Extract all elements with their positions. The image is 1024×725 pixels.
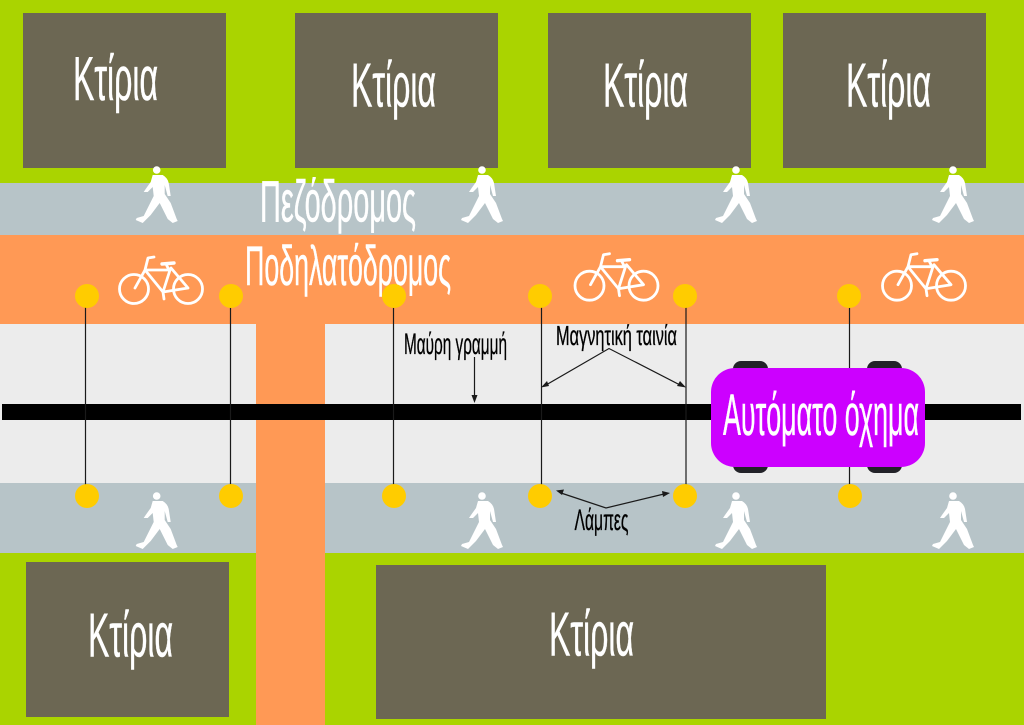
- magnetic strips: [86, 296, 850, 496]
- label: black line with arrow: [404, 328, 507, 403]
- building: top 3: Κτίρια: [603, 52, 688, 120]
- building: top 1: [23, 13, 226, 168]
- building: top 4: [783, 13, 986, 168]
- building: top 2: [295, 13, 498, 168]
- autonomous vehicle: [711, 361, 925, 473]
- label: magnetic strip with arrows: Μαγνητική ταινία: [556, 320, 677, 351]
- cycle path: vertical: [256, 324, 325, 725]
- building: bottom 2: [376, 565, 826, 719]
- icon: bicycle 2: [575, 254, 658, 300]
- label: lamps with arrows: [556, 490, 670, 537]
- building: bottom 1: [26, 562, 229, 717]
- building: top 1: Κτίρια: [73, 45, 158, 114]
- icons: pedestrians bottom row: [136, 492, 974, 549]
- text: Ποδηλατόδρομος: [245, 234, 451, 297]
- pedestrian walkway: bottom: [0, 483, 1024, 553]
- building: bottom 2: Κτίρια: [549, 600, 634, 670]
- icon: bicycle 1: [120, 257, 202, 304]
- building: top 4: Κτίρια: [846, 52, 931, 120]
- icon: bicycle 3: [882, 254, 966, 300]
- building: top 3: [548, 13, 751, 168]
- building: top 2: Κτίρια: [351, 52, 436, 120]
- black guide line: [2, 404, 1021, 420]
- label: black line with arrow: Μαύρη γραμμή: [404, 328, 507, 361]
- lamps: [75, 284, 862, 508]
- cycle path: horizontal: [0, 235, 1024, 324]
- label: lamps with arrows: Λάμπες: [574, 504, 628, 537]
- pedestrian walkway: top: [0, 183, 1024, 235]
- building: bottom 1: Κτίρια: [88, 602, 173, 670]
- label: magnetic strip with arrows: [541, 320, 686, 388]
- road surface: [0, 324, 1024, 483]
- icons: pedestrians top row: [136, 166, 974, 223]
- text: Πεζόδρομος: [260, 170, 416, 234]
